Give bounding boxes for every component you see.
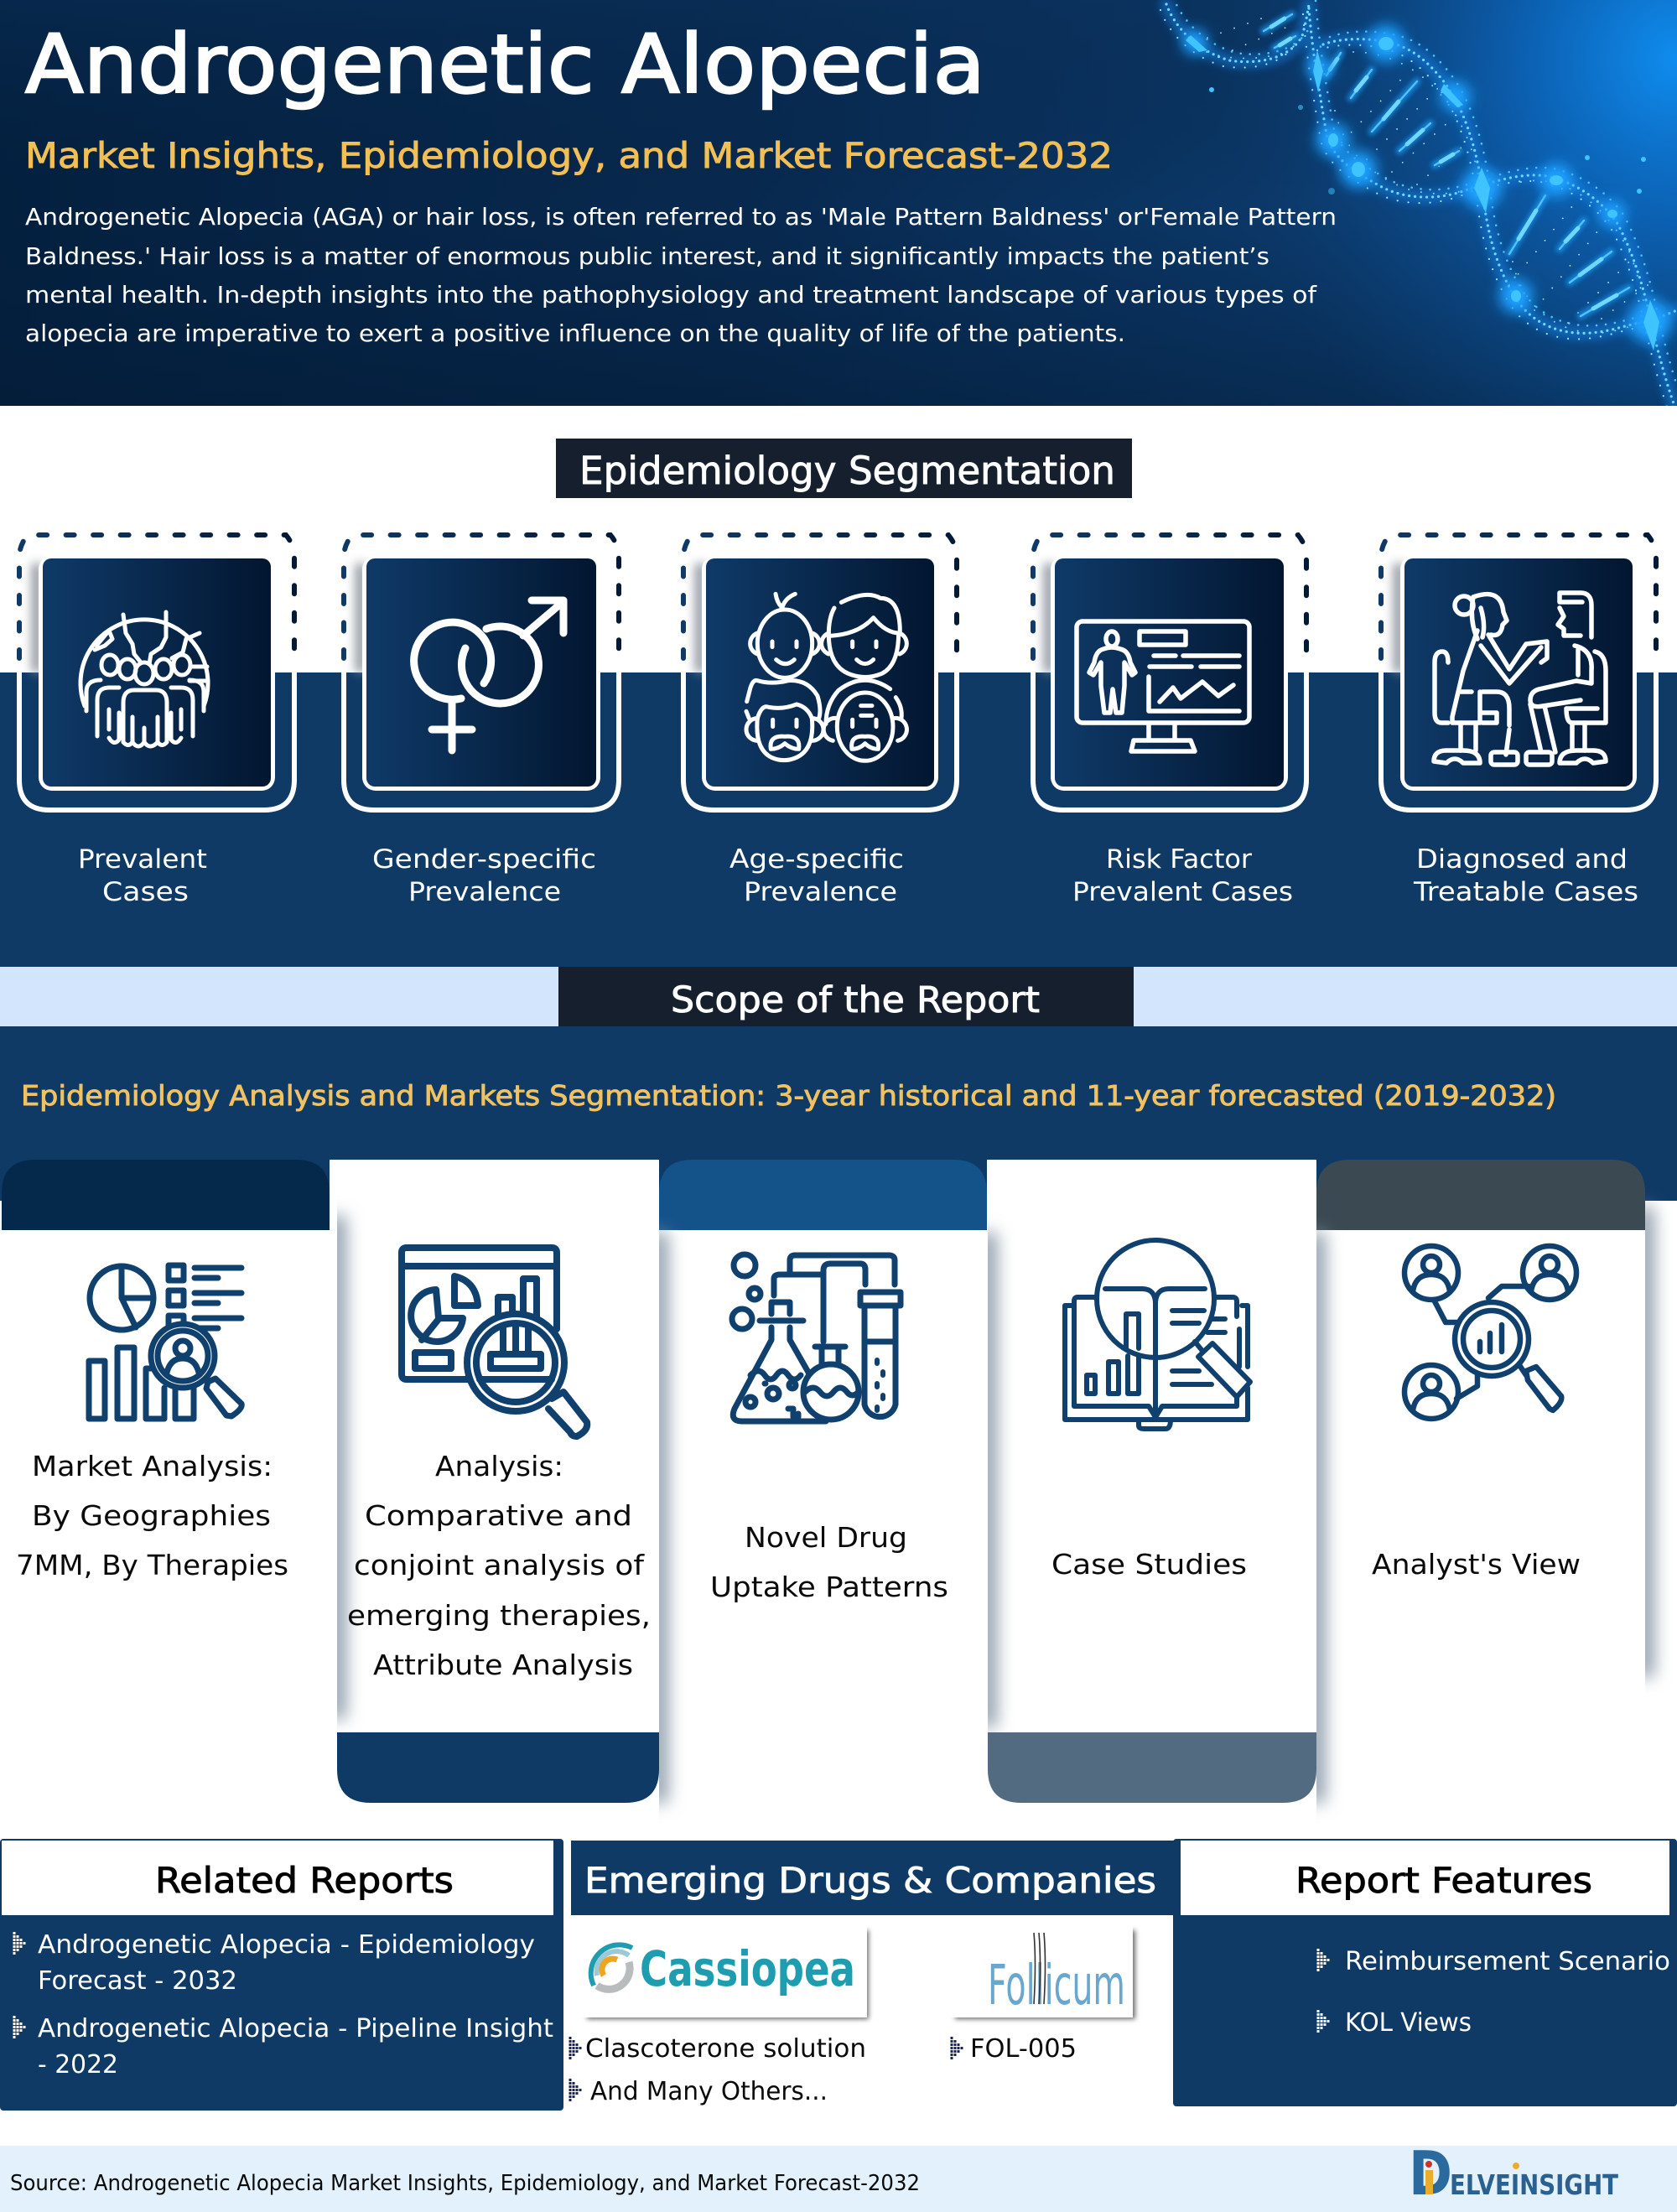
logo: DelveInsight <box>1409 2138 1618 2209</box>
label: Gender-specific Prevalence: Prevalence <box>408 877 561 907</box>
DNA helix illustration <box>1160 0 1677 412</box>
label: Diagnosed and Treatable Cases <box>1413 844 1638 907</box>
logo card: Cassiopea <box>581 1924 869 2019</box>
drug list: And Many Others... <box>590 2077 828 2106</box>
heading: Epidemiology Segmentation: Epidemiology Segmentation <box>579 449 1115 493</box>
list: related reports: - 2022 <box>38 2050 118 2080</box>
label: Risk Factor Prevalent Cases: Risk Factor <box>1106 844 1252 875</box>
text: comparative analysis: emerging therapies, <box>347 1599 651 1632</box>
panel: scope background <box>0 1026 1677 1201</box>
text: market analysis: 7MM, By Therapies <box>16 1549 288 1581</box>
card: Risk Factor Prevalent Cases <box>1033 535 1306 810</box>
icon: analysts network magnifier <box>1404 1246 1576 1419</box>
panel: Report Features <box>1173 1839 1677 2106</box>
logo card: Follicum: Follicum <box>988 1953 1125 2017</box>
icon: globe and people <box>80 612 208 746</box>
drug list <box>570 2034 1077 2106</box>
text: comparative analysis: Attribute Analysis <box>373 1649 633 1681</box>
scope cards white base <box>0 1160 1677 1838</box>
panel: scope of the report band <box>0 967 1677 1026</box>
panel: Related Reports <box>0 1839 563 2111</box>
logo card: Cassiopea: Cassiopea <box>640 1940 855 1997</box>
footer <box>0 2138 1677 2212</box>
bottom tab <box>988 1732 1316 1803</box>
icon: gender symbols <box>414 600 563 750</box>
text: case studies: Case Studies <box>1051 1548 1247 1581</box>
list: related reports: Androgenetic Alopecia - Pipeline Insight <box>38 2014 553 2043</box>
list: related reports: Forecast - 2032 <box>38 1966 237 1996</box>
card: Case Studies <box>979 1233 1316 1803</box>
text: comparative analysis: conjoint analysis of <box>354 1549 646 1581</box>
logo: DelveInsight: D <box>1409 2138 1452 2209</box>
card: Gender-specific Prevalence <box>344 535 619 810</box>
logo: DelveInsight: ELVEINSIGHT <box>1450 2168 1618 2201</box>
card: Novel Drug Uptake Patterns <box>651 1160 987 1803</box>
text: comparative analysis: Comparative and <box>365 1499 632 1532</box>
scope subheading: Epidemiology Analysis and Markets Segmentation: 3-year historical and 11-year forecasted (2019-2032) <box>21 1079 1556 1112</box>
label: Prevalent Cases: Cases <box>102 877 189 907</box>
card: Diagnosed and Treatable Cases <box>1381 535 1656 810</box>
list: related reports <box>14 1930 553 2080</box>
panel: epidemiology background band <box>0 672 1677 967</box>
label: Risk Factor Prevalent Cases: Prevalent Cases <box>1072 877 1293 907</box>
card: Comparative Analysis <box>329 1216 659 1803</box>
intro paragraph: mental health. In-depth insights into the pathophysiology and treatment landscape of various types of <box>25 281 1317 309</box>
icon: doctor and patient seated <box>1434 593 1606 765</box>
list: related reports: Androgenetic Alopecia - Epidemiology <box>38 1930 535 1960</box>
logo card: Follicum <box>949 1924 1135 2019</box>
icon: open book under magnifier <box>1065 1240 1250 1429</box>
label: Risk Factor Prevalent Cases <box>1072 844 1293 907</box>
label: Diagnosed and Treatable Cases: Diagnosed and <box>1416 844 1628 875</box>
title: Androgenetic Alopecia <box>25 18 985 112</box>
heading: Epidemiology Segmentation <box>556 439 1132 498</box>
label: Gender-specific Prevalence: Gender-specific <box>372 844 596 875</box>
heading: Emerging Drugs & Companies: Emerging Drugs & Companies <box>584 1860 1156 1901</box>
text: comparative analysis: Analysis: <box>435 1450 563 1482</box>
icon: medical monitor with body chart <box>1077 621 1249 751</box>
heading: Related Reports: Related Reports <box>155 1860 454 1901</box>
text: novel drug uptake: Novel Drug <box>745 1521 907 1554</box>
text: comparative analysis <box>347 1450 651 1681</box>
bottom tab <box>337 1732 659 1803</box>
drug list: FOL-005 <box>970 2034 1077 2064</box>
drug list: Clascoterone solution <box>585 2034 866 2064</box>
intro paragraph: alopecia are imperative to exert a positive influence on the quality of life of the patients. <box>25 319 1125 347</box>
list: report features: Reimbursement Scenario <box>1345 1947 1670 1976</box>
icon: four faces of different ages <box>746 594 906 761</box>
label: Prevalent Cases <box>78 844 207 907</box>
text: novel drug uptake: Uptake Patterns <box>710 1571 948 1603</box>
intro paragraph <box>25 203 1337 347</box>
text: analyst's view: Analyst's View <box>1372 1548 1581 1581</box>
header banner <box>0 0 1677 412</box>
list: report features <box>1318 1947 1670 2038</box>
icon: dashboard with magnifier <box>402 1248 587 1436</box>
icon: lab flasks and tubes <box>732 1254 901 1421</box>
card: Age-specific Prevalence <box>683 535 957 810</box>
label: Age-specific Prevalence <box>729 844 904 907</box>
heading: Scope of the Report: Scope of the Report <box>671 979 1040 1021</box>
icon: market analysis charts <box>89 1265 241 1419</box>
label: Gender-specific Prevalence <box>372 844 596 907</box>
card: Market Analysis <box>2 1160 330 1581</box>
intro paragraph: Baldness.' Hair loss is a matter of enormous public interest, and it significantly impacts the patient’s <box>25 242 1269 270</box>
card: Analyst's View <box>1308 1160 1654 1803</box>
text: market analysis: Market Analysis: <box>32 1450 273 1482</box>
intro paragraph: Androgenetic Alopecia (AGA) or hair loss, is often referred to as 'Male Pattern Baldness' or'Female Pattern <box>25 203 1337 231</box>
text: market analysis: By Geographies <box>32 1499 271 1532</box>
panel: Emerging Drugs and Companies <box>570 1841 1175 2106</box>
heading: Scope of the Report <box>558 967 1134 1026</box>
source note: Source: Androgenetic Alopecia Market Insights, Epidemiology, and Market Forecast-2032 <box>10 2171 920 2196</box>
card: Prevalent Cases <box>19 535 294 810</box>
subtitle: Market Insights, Epidemiology, and Market Forecast-2032 <box>25 135 1113 176</box>
label: Prevalent Cases: Prevalent <box>78 844 207 875</box>
heading: Report Features: Report Features <box>1295 1860 1592 1901</box>
label: Age-specific Prevalence: Prevalence <box>744 877 897 907</box>
list: report features: KOL Views <box>1345 2008 1472 2038</box>
label: Age-specific Prevalence: Age-specific <box>729 844 904 875</box>
label: Diagnosed and Treatable Cases: Treatable Cases <box>1413 877 1638 907</box>
text: novel drug uptake <box>710 1521 948 1603</box>
text: market analysis <box>16 1450 288 1581</box>
